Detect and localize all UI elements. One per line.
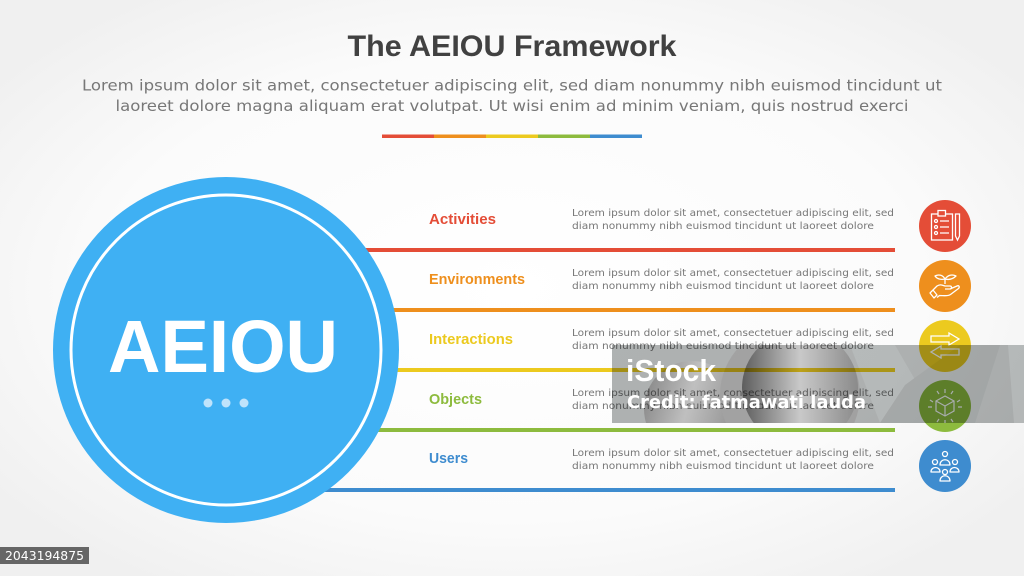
image id tag: 2043194875 xyxy=(5,549,84,563)
subtitle text block xyxy=(82,76,942,115)
watermark logo: iStock xyxy=(626,353,717,388)
row: Objects: Objects xyxy=(429,391,482,408)
watermark band xyxy=(612,345,1024,423)
subtitle text block: laoreet dolore magna aliquam erat volutpat. Ut wisi enim ad minim veniam, quis nostrud exerci xyxy=(116,97,908,115)
row: Objects: Lorem ipsum dolor sit amet, consectetuer adipiscing elit, sed xyxy=(572,388,894,399)
row: Users: diam nonummy nibh euismod tincidunt ut laoreet dolore xyxy=(572,461,874,472)
icon: opposite arrows xyxy=(919,320,971,372)
row: Environments: Lorem ipsum dolor sit amet, consectetuer adipiscing elit, sed xyxy=(572,268,894,279)
title: The AEIOU Framework xyxy=(348,30,677,63)
row: Interactions: Interactions xyxy=(429,331,513,348)
row: Users: Lorem ipsum dolor sit amet, consectetuer adipiscing elit, sed xyxy=(572,448,894,459)
row: Users: Users xyxy=(429,450,468,467)
rainbow divider xyxy=(382,134,642,138)
row: Environments: diam nonummy nibh euismod tincidunt ut laoreet dolore xyxy=(572,281,874,292)
main AEIOU circle: AEIOU xyxy=(108,305,338,388)
row: Interactions: Lorem ipsum dolor sit amet, consectetuer adipiscing elit, sed xyxy=(572,328,894,339)
row: Interactions xyxy=(340,328,895,372)
icon: clipboard xyxy=(919,200,971,252)
main AEIOU circle xyxy=(53,177,399,523)
watermark credit: Credit: fatmawati lauda xyxy=(627,392,866,413)
subtitle text block: Lorem ipsum dolor sit amet, consectetuer adipiscing elit, sed diam nonummy nibh euismod tincidunt ut xyxy=(82,76,942,94)
row: Activities: diam nonummy nibh euismod tincidunt ut laoreet dolore xyxy=(572,221,874,232)
icon: hand with plant xyxy=(919,260,971,312)
icon: group of people xyxy=(919,440,971,492)
row: Environments xyxy=(340,268,895,312)
row: Objects: diam nonummy nibh euismod tincidunt ut laoreet dolore xyxy=(572,401,874,412)
row: Objects xyxy=(340,388,895,432)
row: Interactions: diam nonummy nibh euismod tincidunt ut laoreet dolore xyxy=(572,341,874,352)
row: Activities xyxy=(340,208,895,252)
row: Activities: Lorem ipsum dolor sit amet, consectetuer adipiscing elit, sed xyxy=(572,208,894,219)
icon: box with rays xyxy=(919,380,971,432)
row: Activities: Activities xyxy=(429,211,496,228)
row: Environments: Environments xyxy=(429,271,525,288)
row: Users xyxy=(300,448,895,492)
